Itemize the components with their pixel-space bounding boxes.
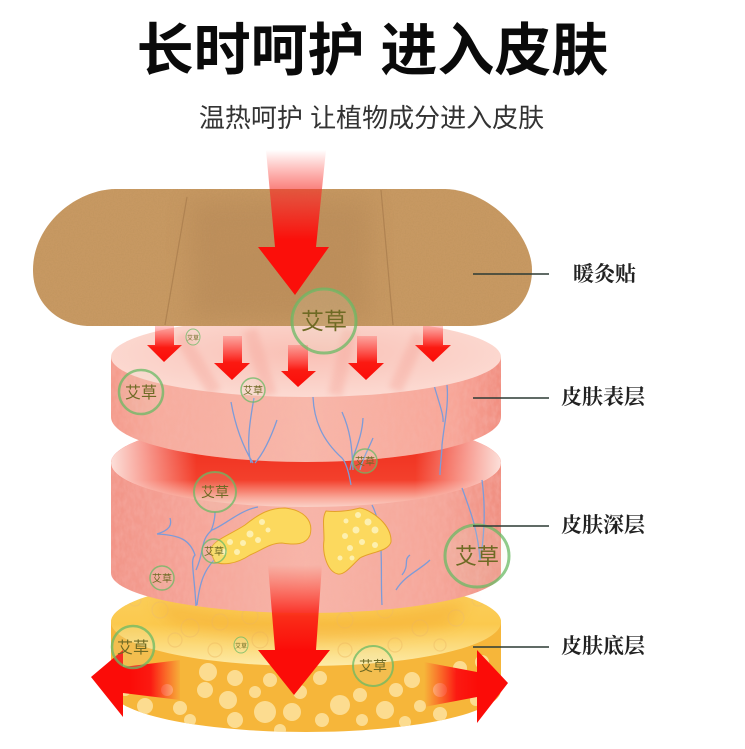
fat gland left bbox=[210, 508, 311, 564]
left arrow bbox=[91, 650, 180, 717]
panel: warming patch bbox=[33, 189, 532, 326]
bubble 2: 艾草 bbox=[187, 334, 199, 342]
small arrows bbox=[147, 326, 451, 387]
big lower arrow bbox=[258, 565, 330, 695]
panel: bottom skin layer bbox=[111, 595, 501, 732]
subtitle: 温热呵护 让植物成分进入皮肤 bbox=[199, 103, 544, 133]
bubble 7: 艾草 bbox=[204, 546, 224, 558]
panel: surface skin layer bbox=[111, 317, 501, 485]
bubble 12 bbox=[353, 646, 393, 686]
label: bottom layer: 皮肤底层 bbox=[561, 634, 646, 658]
fat cells bbox=[119, 655, 489, 736]
label: surface layer: 皮肤表层 bbox=[561, 385, 646, 409]
herb bubbles bbox=[112, 289, 509, 686]
title: 长时呵护 进入皮肤 bbox=[137, 19, 608, 83]
bubble 10 bbox=[112, 626, 154, 668]
top surface of deep layer bbox=[111, 419, 501, 507]
label: deep layer: 皮肤深层 bbox=[561, 513, 646, 537]
bubble 12: 艾草 bbox=[359, 658, 387, 674]
bubble 7 bbox=[202, 539, 226, 563]
bubble 8 bbox=[150, 566, 174, 590]
top surface of surface layer bbox=[111, 317, 501, 397]
bubble 9 bbox=[445, 525, 509, 587]
bubble 6 bbox=[194, 472, 236, 512]
big top arrow bbox=[258, 150, 329, 295]
bubble 8: 艾草 bbox=[152, 573, 172, 585]
label: warming patch: 暖灸贴 bbox=[573, 262, 636, 286]
bubble 1 bbox=[292, 289, 356, 353]
bubble 5: 艾草 bbox=[355, 456, 375, 468]
bubble 3 bbox=[119, 370, 163, 414]
bubble 5 bbox=[353, 449, 377, 473]
bubble 10: 艾草 bbox=[117, 639, 149, 657]
bubble 9: 艾草 bbox=[455, 544, 499, 569]
bubble 4: 艾草 bbox=[243, 385, 263, 397]
bubble 11 bbox=[234, 637, 248, 653]
fat gland right bbox=[324, 508, 391, 574]
bubble 6: 艾草 bbox=[201, 484, 229, 500]
bubble 4 bbox=[241, 378, 265, 402]
panel: deep skin layer bbox=[111, 419, 501, 613]
blood vessels surface bbox=[231, 385, 447, 485]
bubble 1: 艾草 bbox=[301, 308, 347, 334]
bubble 11: 艾草 bbox=[235, 642, 247, 650]
right arrow bbox=[424, 650, 508, 723]
bubble 3: 艾草 bbox=[125, 384, 157, 402]
bubble 2 bbox=[186, 329, 200, 345]
blood vessels deep bbox=[157, 480, 484, 606]
top surface of bottom layer bbox=[111, 578, 501, 666]
